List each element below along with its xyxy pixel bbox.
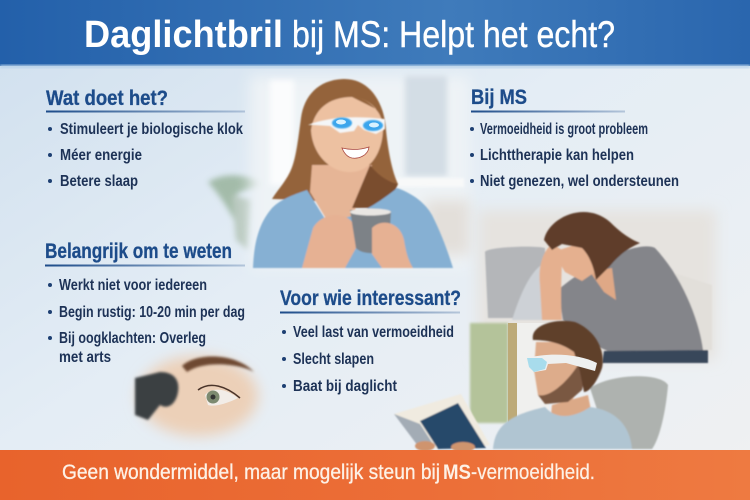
photo: open book: [394, 394, 490, 452]
panel: wat doet het: Betere slaap: [60, 173, 138, 190]
photo: man reading with light glasses: [470, 321, 668, 449]
panel: belangrijk om te weten: Begin rustig: 10-20 min per dag: [59, 304, 245, 321]
glasses: [308, 117, 385, 134]
footer text: -vermoeidheid.: [471, 461, 595, 484]
panel: voor wie interessant: Slecht slapen: [293, 351, 374, 368]
heading: Bij MS: [471, 86, 527, 109]
footer bar: [0, 450, 750, 500]
panel: wat doet het: Stimuleert je biologische klok: [60, 121, 243, 138]
panel: bij MS: Niet genezen, wel ondersteunen: [480, 173, 679, 190]
panel: wat doet het: Méer energie: [60, 147, 142, 164]
title: Daglichtbril: [84, 14, 283, 56]
panel: belangrijk om te weten: Bij oogklachten: Overleg: [59, 330, 206, 347]
panel: voor wie interessant: [280, 287, 461, 395]
glasses: [527, 355, 597, 372]
panel: wat doet het: [46, 87, 245, 190]
title continuation: bij MS: Helpt het echt?: [292, 14, 615, 55]
panel: bij MS: Vermoeidheid is groot probleem: [480, 121, 648, 138]
panel: belangrijk om te weten: Werkt niet voor iedereen: [59, 277, 207, 294]
footer text: Geen wondermiddel, maar mogelijk steun bij: [62, 461, 440, 484]
heading: Belangrijk om te weten: [45, 240, 232, 263]
panel: belangrijk om te weten: met arts: [59, 349, 111, 366]
panel: voor wie interessant: Baat bij daglicht: [293, 378, 398, 395]
heading: Wat doet het?: [46, 87, 168, 110]
plant: [208, 175, 275, 250]
footer text: MS: [443, 461, 471, 484]
title bar: [0, 0, 750, 68]
photo: woman with light glasses and mug: [250, 76, 470, 268]
panel: belangrijk om te weten: [45, 240, 245, 366]
panel: voor wie interessant: Veel last van vermoeidheid: [293, 324, 454, 341]
photo: tired woman on sofa: [478, 210, 716, 363]
heading: Voor wie interessant?: [280, 287, 461, 310]
panel: bij MS: Lichttherapie kan helpen: [480, 147, 634, 164]
photo: eye examination: [135, 356, 258, 436]
panel: bij MS: [470, 86, 679, 190]
